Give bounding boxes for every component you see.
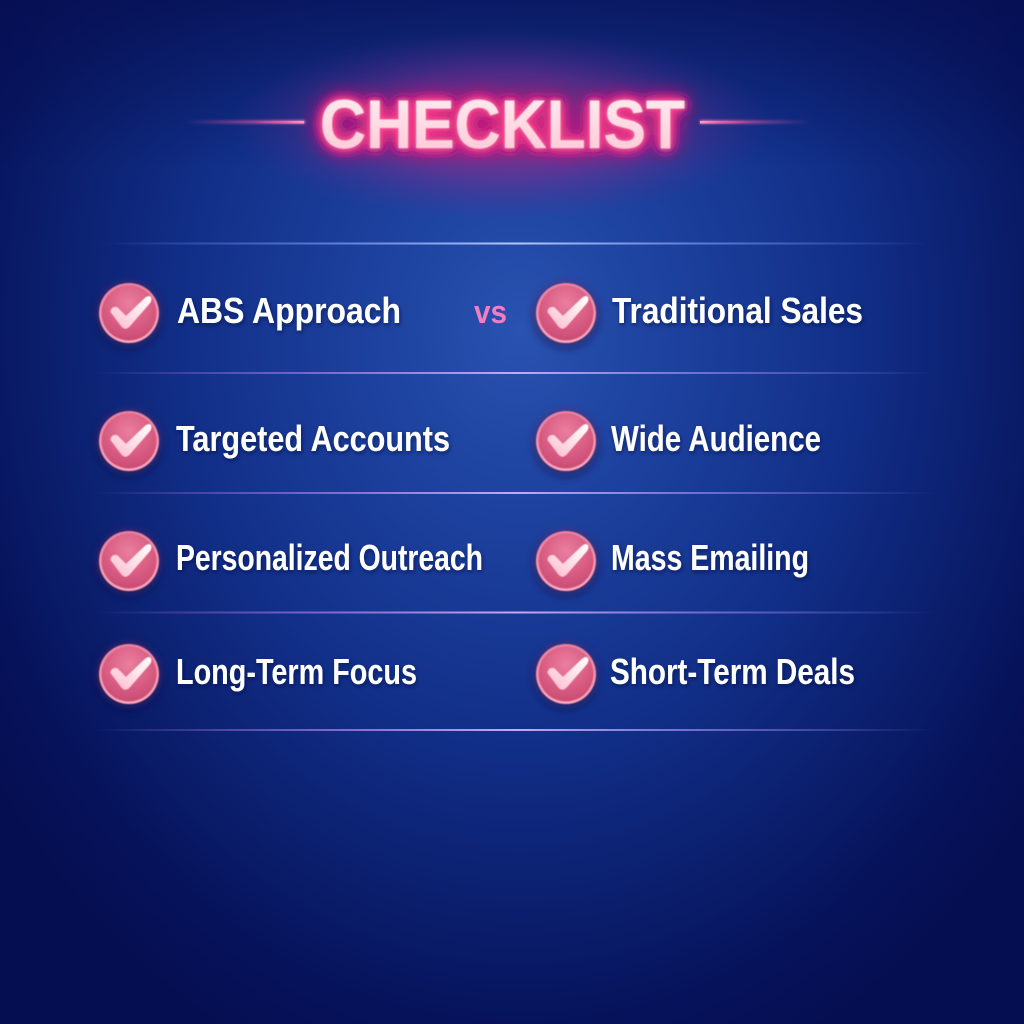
label: ABS Approach: ABS Approach	[177, 290, 401, 331]
icon: check badge	[96, 643, 162, 710]
icon: check badge	[96, 282, 162, 349]
title text: CHECKLIST	[320, 86, 685, 163]
row 2: Targeted Accounts / Wide Audience	[96, 410, 821, 477]
label: Mass Emailing: Mass Emailing	[611, 537, 809, 578]
title right accent line	[700, 120, 810, 124]
icon: check badge	[533, 530, 599, 597]
label: Targeted Accounts: Targeted Accounts	[176, 418, 450, 459]
row 1: ABS Approach vs Traditional Sales	[96, 282, 863, 349]
vs label: vs	[474, 294, 507, 330]
icon: check badge	[533, 410, 599, 477]
label: Traditional Sales: Traditional Sales	[612, 290, 863, 331]
icon: check badge	[96, 410, 162, 477]
icon: check badge	[96, 530, 162, 597]
label: Short-Term Deals: Short-Term Deals	[610, 651, 855, 692]
label: Wide Audience: Wide Audience	[611, 418, 821, 459]
divider lines	[95, 242, 935, 731]
label: Long-Term Focus: Long-Term Focus	[176, 651, 417, 692]
label: Personalized Outreach: Personalized Outreach	[176, 537, 483, 578]
row 4: Long-Term Focus / Short-Term Deals	[96, 643, 855, 710]
icon: check badge	[533, 643, 599, 710]
title left accent line	[185, 120, 305, 124]
row 3: Personalized Outreach / Mass Emailing	[96, 530, 809, 597]
icon: check badge	[533, 282, 599, 349]
title	[185, 30, 810, 220]
